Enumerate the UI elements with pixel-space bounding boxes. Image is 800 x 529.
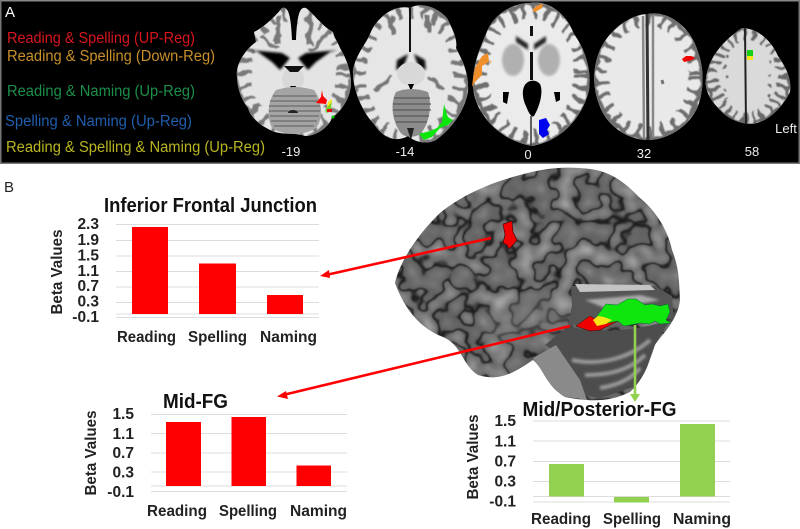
category labels: Spelling — [219, 503, 277, 520]
slice coordinate labels: -14 — [396, 144, 414, 159]
panel label A: A — [5, 4, 15, 21]
brain slice z=32 — [594, 13, 702, 140]
chart: inferior frontal junction — [49, 195, 319, 346]
category labels — [117, 329, 317, 346]
brainstem — [533, 345, 587, 400]
y axis ticks — [107, 406, 134, 501]
chart title: Mid/Posterior-FG — [522, 399, 676, 421]
y axis ticks: 1.1 — [494, 434, 516, 450]
slice coordinate labels: -19 — [282, 144, 300, 159]
legend: reading and spelling down-regulated: Reading & Spelling (Down-Reg) — [7, 48, 215, 65]
category labels: Reading — [531, 511, 591, 528]
y axis ticks: 0.3 — [494, 474, 516, 490]
slice coordinate labels: Left — [775, 121, 797, 136]
slice coordinate labels: 0 — [524, 147, 532, 162]
y axis ticks: 1.5 — [112, 406, 134, 423]
y axis ticks: 1.5 — [494, 413, 516, 430]
brain slice z=0 — [470, 0, 592, 148]
bars — [549, 424, 715, 502]
y axis ticks: 0.7 — [494, 454, 516, 470]
y axis ticks: 0.7 — [112, 445, 134, 462]
y axis ticks: -0.1 — [107, 484, 134, 501]
activation cluster — [682, 56, 695, 62]
brain slice z=-19 — [236, 8, 351, 136]
y axis ticks — [489, 413, 516, 510]
category labels: Reading — [117, 329, 176, 346]
cerebellum — [540, 320, 670, 398]
activation clusters — [472, 4, 550, 138]
category labels — [531, 511, 731, 528]
slice coordinate labels: 58 — [745, 144, 759, 159]
temporal lobe highlight — [480, 294, 572, 345]
y axis ticks: 1.1 — [77, 263, 99, 280]
y axis ticks: 0.3 — [112, 464, 134, 482]
y axis title: Beta Values — [83, 410, 100, 496]
chart: mid/posterior-FG — [465, 399, 731, 528]
bars — [132, 227, 303, 314]
y axis ticks: 1.1 — [112, 426, 134, 443]
y axis ticks: -0.1 — [72, 309, 99, 326]
category labels: Spelling — [603, 511, 661, 528]
activation cluster: fusiform gyrus — [576, 299, 671, 331]
y axis ticks: 0.3 — [77, 294, 99, 310]
category labels: Naming — [673, 511, 731, 528]
y axis ticks: -0.1 — [489, 494, 516, 510]
legend: spelling and naming: Spelling & Naming (Up-Reg) — [5, 113, 192, 130]
y axis ticks: 1.5 — [77, 248, 99, 264]
chart title: Mid-FG — [163, 391, 228, 413]
activation cluster: inferior frontal junction — [503, 221, 517, 249]
brain slice z=-14 — [352, 5, 468, 142]
chart: mid-FG — [83, 391, 347, 520]
arrow: brain to mid/posterior-FG chart — [630, 325, 640, 402]
category labels: Naming — [290, 503, 347, 520]
activation cluster — [316, 90, 334, 118]
panel label B: B — [4, 179, 14, 196]
arrow: brain to inferior frontal junction chart — [320, 238, 491, 278]
chart title: Inferior Frontal Junction — [104, 195, 317, 217]
category labels: Reading — [147, 503, 207, 520]
3D brain surface render — [390, 160, 685, 405]
slice coordinate labels — [282, 121, 797, 162]
slice coordinate labels: 32 — [637, 146, 651, 161]
legend: reading and spelling up-regulated: Reading & Spelling (UP-Reg) — [7, 30, 195, 47]
y axis ticks: 1.9 — [77, 232, 99, 249]
y axis title: Beta Values — [49, 230, 66, 314]
legend: reading and naming: Reading & Naming (Up-Reg) — [7, 83, 195, 100]
occipital cut — [568, 286, 674, 326]
y axis ticks: 2.3 — [77, 216, 99, 233]
activation cluster — [747, 50, 753, 60]
category labels: Naming — [260, 329, 317, 346]
activation cluster — [419, 104, 453, 140]
panel A: axial brain slices with legend — [0, 0, 800, 164]
category labels — [147, 503, 347, 520]
brain slice z=58 — [706, 28, 790, 124]
y axis ticks — [72, 216, 99, 326]
category labels: Spelling — [188, 329, 247, 346]
legend: all three tasks: Reading & Spelling & Naming (Up-Reg) — [6, 139, 265, 156]
bars — [166, 417, 331, 486]
y axis title: Beta Values — [465, 414, 482, 500]
y axis ticks: 0.7 — [77, 278, 99, 295]
legend — [5, 30, 265, 156]
arrow: brain to mid-FG chart — [277, 326, 570, 399]
